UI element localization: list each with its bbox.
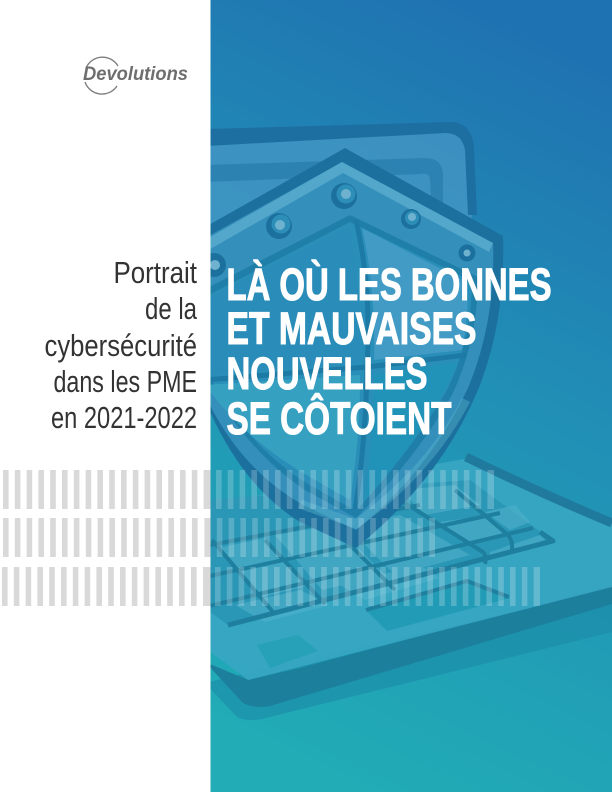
main title: SE CÔTOIENT <box>226 393 452 444</box>
shield cross dark lines <box>205 220 466 510</box>
main title: NOUVELLES <box>226 348 428 399</box>
stripes row 3 <box>2 567 540 606</box>
logo: Devolutions <box>83 57 188 94</box>
main title: ET MAUVAISES <box>226 303 476 354</box>
subtitle text block: cybersécurité <box>44 328 197 363</box>
laptop base lower shadow <box>210 604 612 720</box>
bottom lighter rim of shield <box>300 400 466 524</box>
fingerprint pad <box>257 635 318 668</box>
stripes row 1 <box>3 470 494 509</box>
laptop hinge dark band <box>466 457 612 523</box>
subtitle text block: en 2021-2022 <box>51 400 197 435</box>
stripes row 2 <box>3 518 435 557</box>
subtitle text block: dans les PME <box>54 364 197 399</box>
main title <box>226 259 552 444</box>
subtitle text block <box>44 255 198 435</box>
subtitle text block: Portrait <box>114 255 197 290</box>
laptop base dark edge <box>205 585 612 707</box>
laptop screen inner dark band <box>210 158 443 202</box>
keyboard <box>205 480 553 625</box>
laptop screen frame dark band <box>205 122 477 215</box>
laptop screen surface <box>210 133 472 224</box>
panel: blue gradient background <box>210 0 612 792</box>
shield metal rim <box>205 162 493 530</box>
subtitle text block: de la <box>145 291 198 326</box>
shield inner face <box>205 222 472 511</box>
laptop base surface <box>205 458 612 680</box>
logo: Devolutions: Devolutions <box>83 63 188 85</box>
shield quadrants <box>362 228 468 360</box>
shield rivets <box>202 183 476 277</box>
illustration: laptop with shield <box>200 122 612 720</box>
trackpad <box>366 581 510 631</box>
shield outer dark band <box>200 148 503 548</box>
shield inner dark line <box>205 215 478 518</box>
